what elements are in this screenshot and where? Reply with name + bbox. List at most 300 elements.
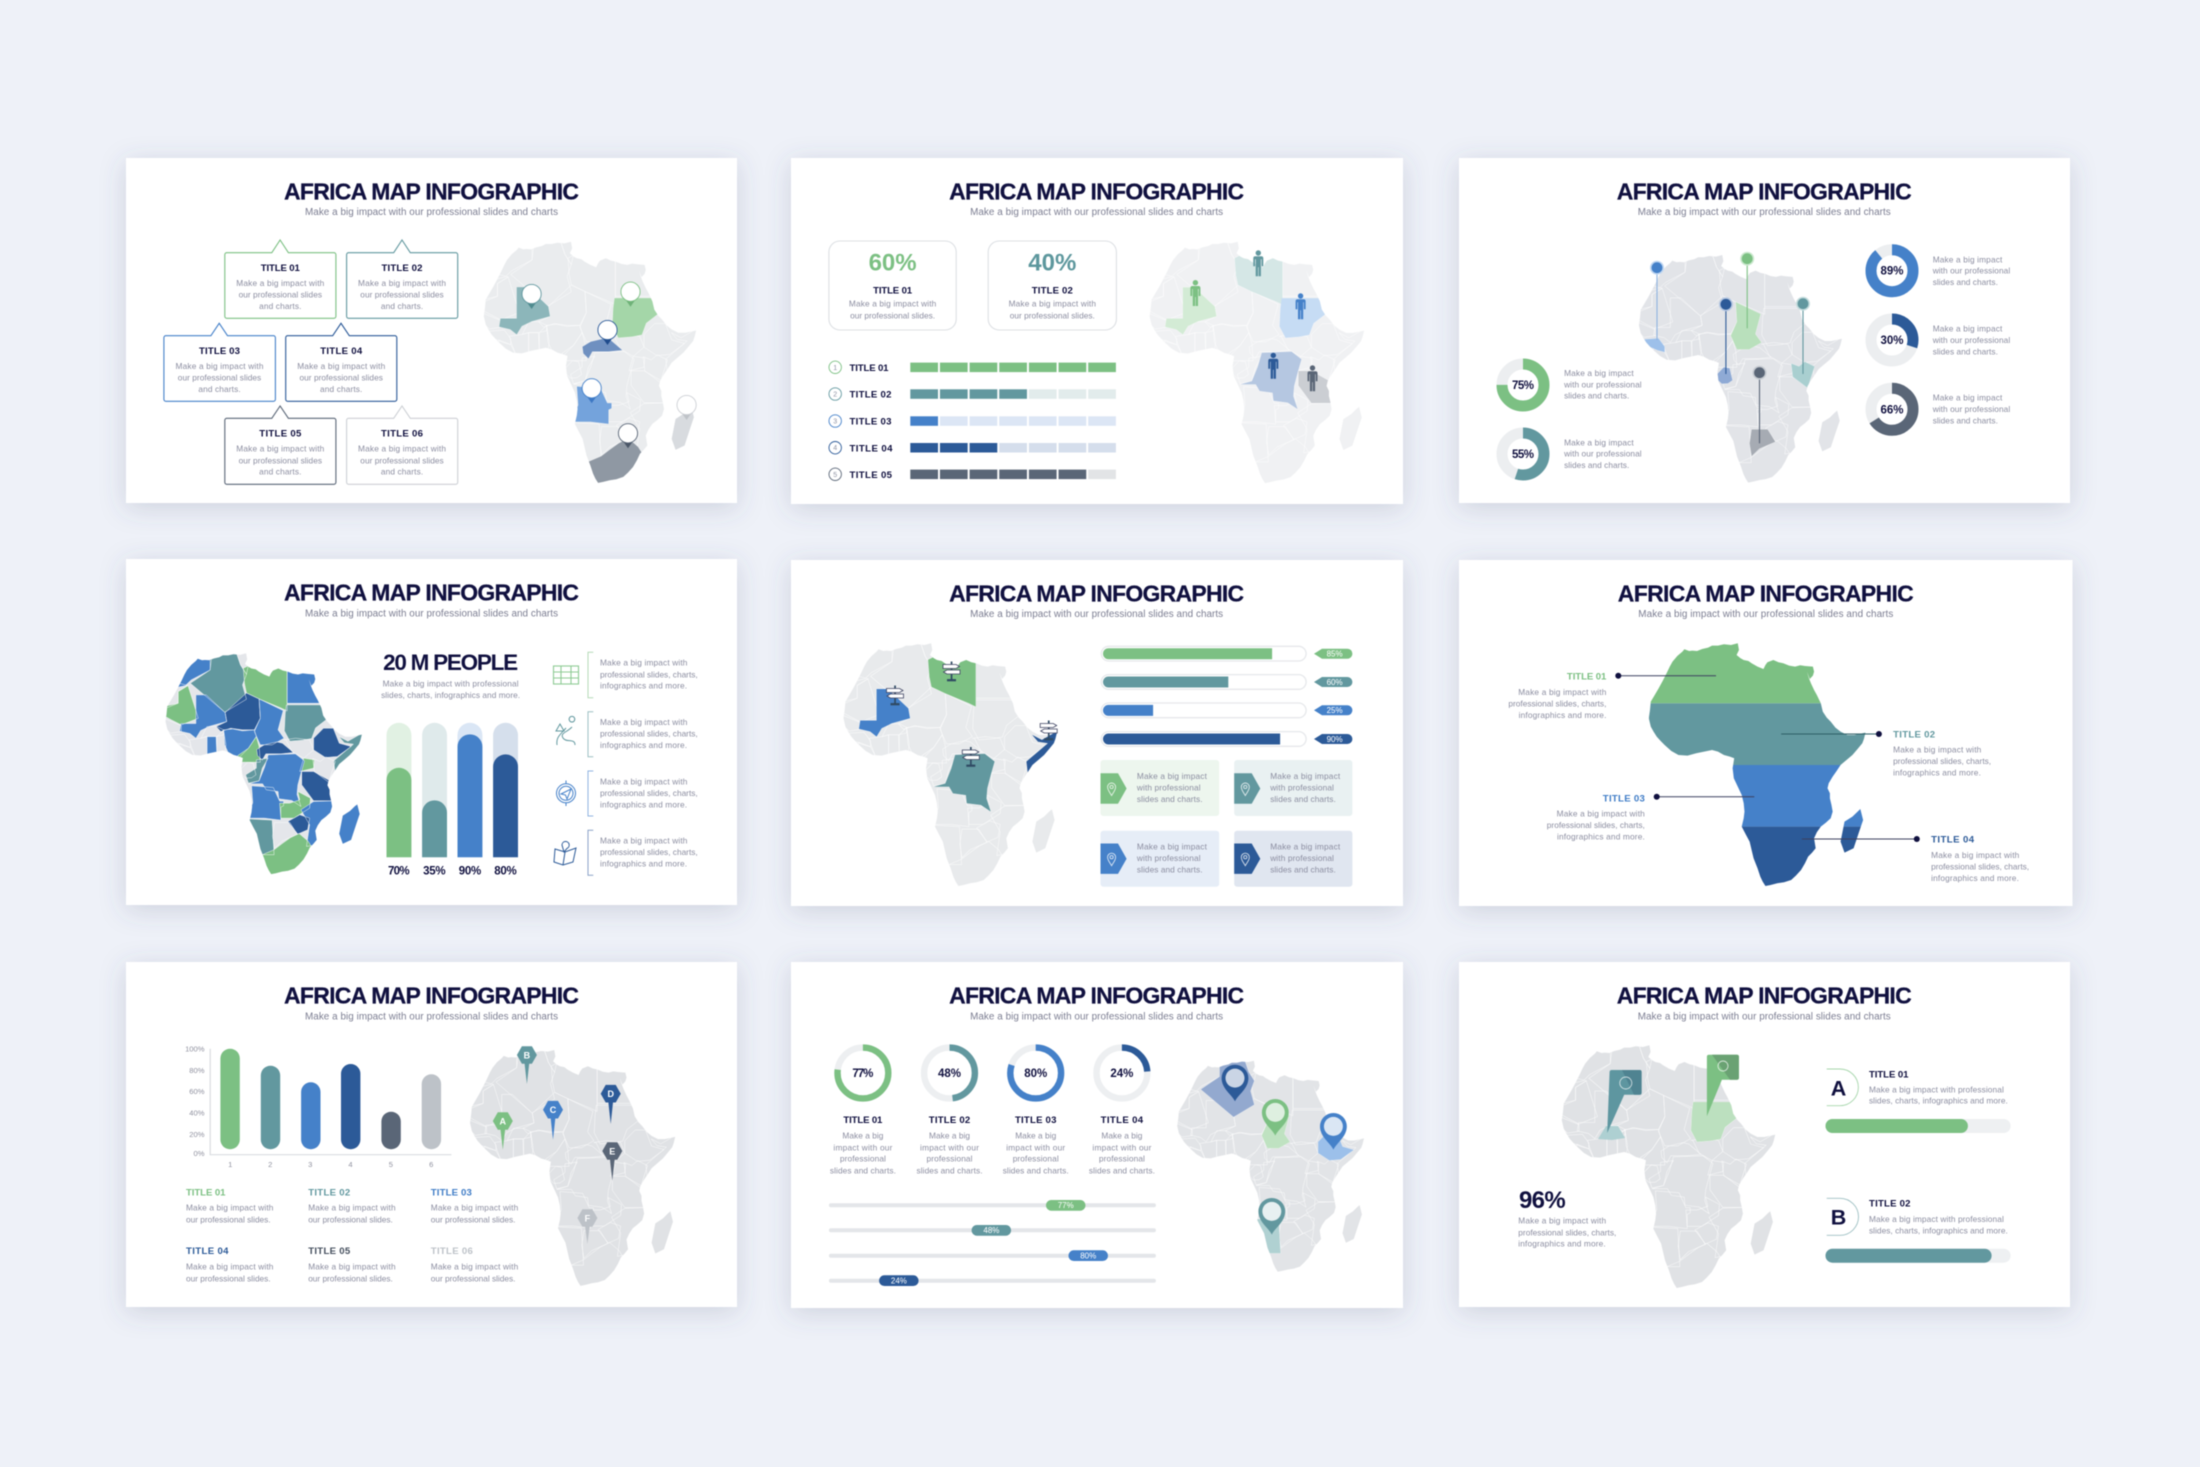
donut text: with our professional	[1932, 404, 2010, 414]
donut text: slides and charts.	[1933, 346, 1998, 356]
subtitle: Make a big impact with our professional slides and charts	[970, 207, 1223, 218]
bar chart: 6	[429, 1160, 433, 1169]
bar chart: 40%	[189, 1108, 205, 1118]
segmented bar: title 05	[829, 468, 1116, 481]
label: title 04	[1931, 835, 2029, 883]
donut text: slides and charts.	[1564, 460, 1629, 470]
segmented bar: title 03	[829, 415, 1116, 428]
progress bar B	[1826, 1249, 2011, 1263]
panel: 20 M people	[126, 559, 737, 905]
progress bar: 90%	[1101, 732, 1352, 746]
callout: title 01: TITLE 01	[261, 263, 300, 274]
text: title 02	[916, 1115, 982, 1175]
callout: title 04: Make a big impact with	[297, 361, 386, 371]
label: title 03: Make a big impact with	[1557, 808, 1645, 818]
stat: 96%: infographics and more.	[1518, 1239, 1606, 1249]
text: title 01: impact with our	[833, 1142, 893, 1152]
donut: 66%	[1871, 388, 1913, 430]
map pins	[522, 282, 696, 448]
panel: flag pins and A/B bars	[1459, 962, 2070, 1307]
hexagon pins A to F: A	[500, 1116, 507, 1126]
info card 3: Make a big impact	[1137, 842, 1208, 852]
text block: title 01: Make a big impact with	[186, 1203, 274, 1213]
callout: title 04: and charts.	[320, 384, 362, 394]
people description: Make a big impact with professional	[383, 678, 519, 688]
label: title 01: TITLE 01	[1567, 671, 1607, 682]
hexagon pins A to F: C	[550, 1105, 557, 1115]
map pin lines	[1650, 252, 1810, 443]
stat card: 40%: 40%	[1028, 250, 1076, 277]
subtitle: Make a big impact with our professional slides and charts	[305, 1011, 558, 1022]
donut text: with our professional	[1563, 449, 1642, 459]
slide card	[791, 560, 1403, 906]
text: title 04	[1089, 1115, 1155, 1175]
text block: title 02	[308, 1187, 396, 1224]
stat card: 40%: our professional slides.	[1010, 310, 1095, 320]
ring: 80%	[1010, 1048, 1061, 1098]
icon: folded map	[554, 841, 576, 865]
map of Africa with highlighted countries	[1145, 238, 1368, 489]
segmented bar: title 02: 2	[833, 392, 837, 398]
segmented bar: title 01	[829, 361, 1116, 374]
text block: title 03: Make a big impact with	[431, 1203, 519, 1213]
info card 2: with professional	[1269, 782, 1334, 792]
heading: 20 M people: 20 M PEOPLE	[383, 650, 518, 675]
text: title 04: Make a big	[1101, 1131, 1143, 1141]
text block: title 04	[186, 1246, 274, 1283]
callout: title 05: Make a big impact with	[236, 444, 325, 454]
donut: 30%	[1871, 319, 1913, 361]
callout: title 03: and charts.	[198, 384, 241, 394]
callout: title 02	[347, 240, 458, 318]
progress bar: 25%: 25%	[1327, 706, 1343, 715]
leader line: title 03	[1654, 794, 1754, 800]
bar chart: 3	[308, 1160, 312, 1169]
leader line: title 01	[1615, 673, 1716, 679]
bar chart: 2	[268, 1160, 272, 1169]
text block: title 05: Make a big impact with	[308, 1262, 396, 1272]
item B	[1827, 1198, 2008, 1235]
bar chart: 5	[389, 1160, 393, 1169]
coloured country map	[162, 650, 365, 880]
item text 2: Make a big impact with	[600, 717, 688, 727]
item B: slides, charts, infographics and more.	[1869, 1225, 2008, 1235]
slide card	[1459, 560, 2072, 906]
item A: Make a big impact with professional	[1869, 1084, 2004, 1094]
slider: 77%: 77%	[1058, 1201, 1074, 1210]
item text 4: professional slides, charts,	[600, 847, 698, 857]
text block: title 06: TITLE 06	[431, 1246, 473, 1257]
text: title 04: impact with our	[1092, 1142, 1152, 1152]
label: title 01: infographics and more.	[1519, 710, 1606, 720]
text: title 01: TITLE 01	[843, 1115, 883, 1126]
text block: title 04: our professional slides.	[186, 1273, 271, 1283]
panel: bar chart with hexagon pins	[126, 962, 737, 1307]
bar chart: 35%	[423, 865, 446, 877]
stat: 96%: professional slides, charts,	[1518, 1227, 1616, 1237]
ring: 24%	[1096, 1048, 1147, 1098]
donut: 55%	[1502, 433, 1544, 475]
callout: title 03: Make a big impact with	[176, 361, 264, 371]
label: title 04: Make a big impact with	[1931, 850, 2020, 860]
text block: title 03: our professional slides.	[431, 1214, 515, 1224]
subtitle: Make a big impact with our professional slides and charts	[970, 1011, 1223, 1022]
segmented bar: title 04	[829, 442, 1116, 454]
people description: slides, charts, infographics and more.	[381, 690, 520, 700]
text block: title 01: TITLE 01	[186, 1187, 226, 1198]
callout: title 05: TITLE 05	[259, 429, 302, 440]
label: title 04: professional slides, charts,	[1931, 862, 2029, 872]
info card 2	[1234, 760, 1352, 816]
callout: title 05	[225, 406, 336, 484]
progress bar: 90%: 90%	[1327, 735, 1343, 744]
callout: title 06: Make a big impact with	[358, 444, 446, 454]
map of Africa with highlighted countries	[1558, 1042, 1779, 1294]
segmented bar: title 01: TITLE 01	[850, 363, 889, 374]
donut text	[1563, 368, 1642, 401]
text: title 03: professional	[1013, 1154, 1059, 1164]
bar chart: 90%	[459, 865, 481, 877]
info card 4	[1234, 831, 1352, 887]
label: title 04: infographics and more.	[1931, 873, 2019, 883]
text: title 01: Make a big	[842, 1131, 884, 1141]
stat card: 60%: Make a big impact with	[849, 299, 937, 309]
progress bar: 85%: 85%	[1327, 650, 1343, 659]
callout: title 06	[347, 406, 458, 484]
info card 4: Make a big impact	[1270, 842, 1341, 852]
donut: 66%: 66%	[1880, 404, 1904, 416]
stat: 96%: Make a big impact with	[1518, 1216, 1606, 1226]
slider: 77%	[829, 1200, 1156, 1211]
label: title 01: professional slides, charts,	[1508, 699, 1606, 709]
bar chart: 80%	[494, 865, 517, 877]
title: AFRICA MAP INFOGRAPHIC	[284, 579, 579, 605]
map of Africa with highlighted countries	[839, 640, 1060, 892]
slide card	[126, 559, 737, 905]
item text 3: professional slides, charts,	[600, 788, 698, 798]
item text 4: infographics and more.	[600, 859, 687, 869]
subtitle: Make a big impact with our professional slides and charts	[1638, 609, 1893, 620]
donut text: Make a big impact	[1564, 437, 1634, 447]
text block: title 03: TITLE 03	[431, 1187, 472, 1198]
label: title 01: Make a big impact with	[1518, 687, 1607, 697]
text block: title 02: TITLE 02	[308, 1187, 350, 1198]
text: title 01	[830, 1115, 896, 1175]
item A: TITLE 01	[1869, 1069, 1909, 1080]
item text 1: professional slides, charts,	[600, 669, 698, 679]
text: title 03: impact with our	[1006, 1142, 1065, 1152]
info card 1: with professional	[1136, 782, 1201, 792]
text: title 03	[1003, 1115, 1069, 1175]
donut text: Make a big impact	[1933, 393, 2003, 403]
item A	[1827, 1069, 2008, 1106]
ring: 48%: 48%	[938, 1068, 961, 1080]
subtitle: Make a big impact with our professional slides and charts	[1638, 207, 1891, 218]
icon: map	[554, 666, 578, 684]
text block: title 02: Make a big impact with	[308, 1203, 396, 1213]
text: title 02: TITLE 02	[929, 1115, 970, 1126]
panel: ring charts and sliders	[791, 962, 1403, 1308]
info card 3	[1100, 831, 1219, 887]
title: AFRICA MAP INFOGRAPHIC	[284, 982, 579, 1008]
item text 3: Make a big impact with	[600, 776, 688, 786]
donut text: with our professional	[1932, 266, 2010, 276]
stat card: 60%	[829, 241, 956, 330]
text: title 04: TITLE 04	[1101, 1115, 1144, 1126]
flag pin: teal	[1607, 1070, 1642, 1133]
donut text: slides and charts.	[1933, 415, 1998, 425]
bar chart: 1	[228, 1160, 232, 1169]
info card 1: Make a big impact	[1137, 771, 1208, 781]
bar chart	[185, 1044, 451, 1169]
bar chart: 70%	[388, 865, 410, 877]
item B: Make a big impact with professional	[1869, 1214, 2004, 1224]
callout: title 03	[164, 323, 275, 401]
item A: slides, charts, infographics and more.	[1869, 1096, 2008, 1106]
progress bar: 25%	[1101, 703, 1352, 718]
label: title 03: TITLE 03	[1603, 793, 1645, 804]
slide card	[1459, 962, 2070, 1307]
bar chart: 0%	[194, 1149, 205, 1158]
label: title 01	[1508, 671, 1607, 720]
panel: people percentages	[791, 158, 1403, 504]
label: title 04: TITLE 04	[1931, 835, 1975, 846]
info card 1: slides and charts.	[1137, 794, 1202, 804]
leader line: title 02	[1781, 731, 1882, 737]
bar chart: 4	[348, 1160, 353, 1169]
callout: title 03: TITLE 03	[199, 346, 240, 357]
stat card: 60%: TITLE 01	[873, 285, 913, 296]
text block: title 06: Make a big impact with	[431, 1262, 519, 1272]
progress bar: 60%	[1101, 675, 1352, 689]
donut text: Make a big impact	[1933, 324, 2003, 334]
label: title 02: TITLE 02	[1893, 729, 1935, 740]
callout: title 01: our professional slides	[239, 290, 322, 300]
text block: title 02: our professional slides.	[308, 1214, 393, 1224]
label: title 02: Make a big impact with	[1893, 744, 1982, 754]
title: AFRICA MAP INFOGRAPHIC	[949, 580, 1244, 606]
hexagon pins A to F: E	[609, 1146, 615, 1156]
subtitle: Make a big impact with our professional slides and charts	[305, 608, 558, 619]
bar chart: 20%	[189, 1130, 205, 1139]
callout: title 02: our professional slides	[360, 290, 444, 300]
segmented bar: title 02	[829, 388, 1116, 401]
title: AFRICA MAP INFOGRAPHIC	[284, 178, 579, 204]
slide card	[126, 962, 737, 1307]
info card 3: with professional	[1136, 853, 1201, 863]
map of Africa in four colour bands	[1644, 638, 1874, 892]
donut: 75%	[1502, 364, 1544, 406]
slider: 80%	[829, 1250, 1156, 1261]
text block: title 01: our professional slides.	[186, 1214, 271, 1224]
text block: title 06: our professional slides.	[431, 1273, 515, 1283]
callout: title 01: and charts.	[259, 301, 301, 311]
stat card: 40%: Make a big impact with	[1009, 299, 1096, 309]
donut text: slides and charts.	[1933, 277, 1998, 287]
label: title 03: infographics and more.	[1557, 831, 1645, 841]
teardrop map pins	[1222, 1065, 1347, 1235]
icon: compass	[556, 780, 576, 806]
icon: road and pin	[556, 716, 575, 745]
text block: title 03	[431, 1187, 519, 1224]
map of Africa with highlighted countries	[480, 238, 700, 489]
text: title 02: slides and charts.	[916, 1165, 982, 1175]
panel: progress bars and signposts	[791, 560, 1403, 906]
person icons	[1190, 250, 1318, 391]
info card 2: Make a big impact	[1270, 771, 1341, 781]
text: title 03: slides and charts.	[1003, 1165, 1069, 1175]
item text 3: infographics and more.	[600, 799, 687, 809]
leader line: title 04	[1802, 836, 1920, 842]
info card 4: slides and charts.	[1270, 865, 1336, 875]
callout: title 04: TITLE 04	[320, 346, 363, 357]
slider: 80%: 80%	[1080, 1252, 1096, 1261]
callout: title 02: and charts.	[381, 301, 423, 311]
stat card: 40%: TITLE 02	[1032, 285, 1073, 296]
callout: title 05: our professional slides	[239, 455, 322, 465]
slide card	[1459, 158, 2070, 503]
item B: TITLE 02	[1869, 1199, 1910, 1210]
hexagon pins A to F: D	[607, 1089, 614, 1099]
callout: title 05: and charts.	[259, 467, 301, 477]
label: title 02	[1893, 729, 1991, 777]
donut text: Make a big impact	[1564, 368, 1634, 378]
text block: title 06	[431, 1246, 519, 1283]
bar chart	[386, 723, 518, 877]
callout: title 04: our professional slides	[300, 373, 383, 383]
title: AFRICA MAP INFOGRAPHIC	[1617, 982, 1912, 1008]
label: title 02: professional slides, charts,	[1893, 756, 1991, 766]
callout: title 02: Make a big impact with	[358, 278, 446, 288]
subtitle: Make a big impact with our professional slides and charts	[305, 207, 558, 218]
text block: title 01	[186, 1187, 274, 1224]
panel: donut stats with map lines	[1459, 158, 2070, 503]
donut: 89%	[1871, 250, 1913, 292]
text: title 02: impact with our	[920, 1142, 979, 1152]
slide card	[791, 158, 1403, 504]
text block: title 05: our professional slides.	[308, 1273, 393, 1283]
label: title 03: professional slides, charts,	[1547, 820, 1645, 830]
progress bar: 85%	[1101, 646, 1352, 661]
brackets	[588, 652, 593, 875]
segmented bar: title 03: 3	[833, 418, 837, 426]
item text 1: Make a big impact with	[600, 658, 688, 668]
text: title 03: TITLE 03	[1015, 1115, 1056, 1126]
donut: 30%: 30%	[1880, 335, 1904, 347]
text: title 01: slides and charts.	[830, 1165, 896, 1175]
text: title 01: professional	[840, 1154, 886, 1164]
donut text	[1932, 324, 2010, 356]
segmented bar: title 05: TITLE 05	[850, 470, 893, 481]
callout: title 06: TITLE 06	[381, 429, 423, 440]
donut text: with our professional	[1563, 379, 1642, 389]
item text 2: infographics and more.	[600, 740, 687, 750]
ring: 48%	[924, 1048, 975, 1098]
panel: banded map	[1459, 560, 2072, 906]
map of Africa	[466, 1046, 678, 1292]
map of Africa with highlighted countries	[1173, 1058, 1367, 1277]
item text 3	[600, 776, 698, 809]
info card 3: slides and charts.	[1137, 865, 1202, 875]
segmented bar: title 01: 1	[833, 365, 837, 372]
donut text	[1563, 437, 1642, 470]
slider: 48%: 48%	[983, 1226, 999, 1235]
bar chart: 60%	[189, 1087, 205, 1096]
donut text: with our professional	[1932, 335, 2010, 345]
item text 1	[600, 658, 698, 691]
hexagon pins A to F	[493, 1046, 622, 1244]
callout: title 03: our professional slides	[178, 373, 261, 383]
item A: A	[1831, 1076, 1846, 1100]
callout: title 01	[225, 240, 336, 318]
label: title 02: infographics and more.	[1893, 767, 1981, 777]
highlighted region	[1598, 1126, 1625, 1140]
slider: 24%: 24%	[891, 1277, 907, 1286]
signpost icons	[886, 662, 1057, 767]
text: title 02: professional	[926, 1154, 973, 1164]
title: AFRICA MAP INFOGRAPHIC	[1618, 580, 1914, 606]
item text 1: infographics and more.	[600, 681, 687, 691]
donut text: slides and charts.	[1564, 391, 1629, 401]
stat: 96%: 96%	[1519, 1187, 1566, 1214]
text: title 04: slides and charts.	[1089, 1165, 1155, 1175]
subtitle: Make a big impact with our professional slides and charts	[970, 609, 1223, 620]
stat card: 60%: 60%	[869, 250, 917, 277]
text block: title 04: Make a big impact with	[186, 1262, 274, 1272]
subtitle: Make a big impact with our professional slides and charts	[1638, 1011, 1891, 1022]
item B: B	[1831, 1205, 1846, 1229]
text block: title 05: TITLE 05	[308, 1246, 351, 1257]
segmented bar: title 04: 4	[833, 445, 837, 452]
ring: 24%: 24%	[1110, 1068, 1133, 1080]
ring: 80%: 80%	[1024, 1068, 1047, 1080]
bar chart: 100%	[185, 1044, 205, 1054]
info card 2: slides and charts.	[1270, 794, 1336, 804]
stat card: 60%: our professional slides.	[850, 310, 935, 320]
flag pin: green	[1707, 1055, 1739, 1116]
text: title 02: Make a big	[929, 1131, 970, 1141]
stat: 96%	[1518, 1187, 1616, 1249]
title: AFRICA MAP INFOGRAPHIC	[949, 982, 1244, 1008]
slide card	[791, 962, 1403, 1308]
callout: title 06: our professional slides	[360, 455, 444, 465]
ring: 77%: 77%	[852, 1068, 873, 1080]
label: title 03	[1547, 793, 1645, 841]
hexagon pins A to F: B	[524, 1050, 531, 1060]
item text 4: Make a big impact with	[600, 836, 688, 846]
text: title 04: professional	[1099, 1154, 1145, 1164]
callout: title 04	[286, 323, 397, 401]
text block: title 05	[308, 1246, 396, 1283]
text: title 03: Make a big	[1015, 1131, 1057, 1141]
bar chart: 80%	[189, 1066, 205, 1075]
donut: 55%: 55%	[1512, 449, 1534, 461]
map of Africa with highlighted countries	[1635, 252, 1845, 488]
info card 4: with professional	[1269, 853, 1334, 863]
slider: 24%	[829, 1275, 1156, 1286]
people description	[381, 678, 520, 700]
donut: 89%: 89%	[1880, 266, 1904, 278]
donut: 75%: 75%	[1512, 380, 1534, 392]
item text 2	[600, 717, 698, 750]
title: AFRICA MAP INFOGRAPHIC	[1617, 178, 1912, 204]
callout: title 02: TITLE 02	[382, 263, 422, 274]
item text 4	[600, 836, 698, 869]
hexagon pins A to F: F	[585, 1213, 591, 1223]
callout: title 06: and charts.	[381, 467, 423, 477]
stat card: 40%	[988, 241, 1116, 330]
callout: title 01: Make a big impact with	[236, 278, 325, 288]
